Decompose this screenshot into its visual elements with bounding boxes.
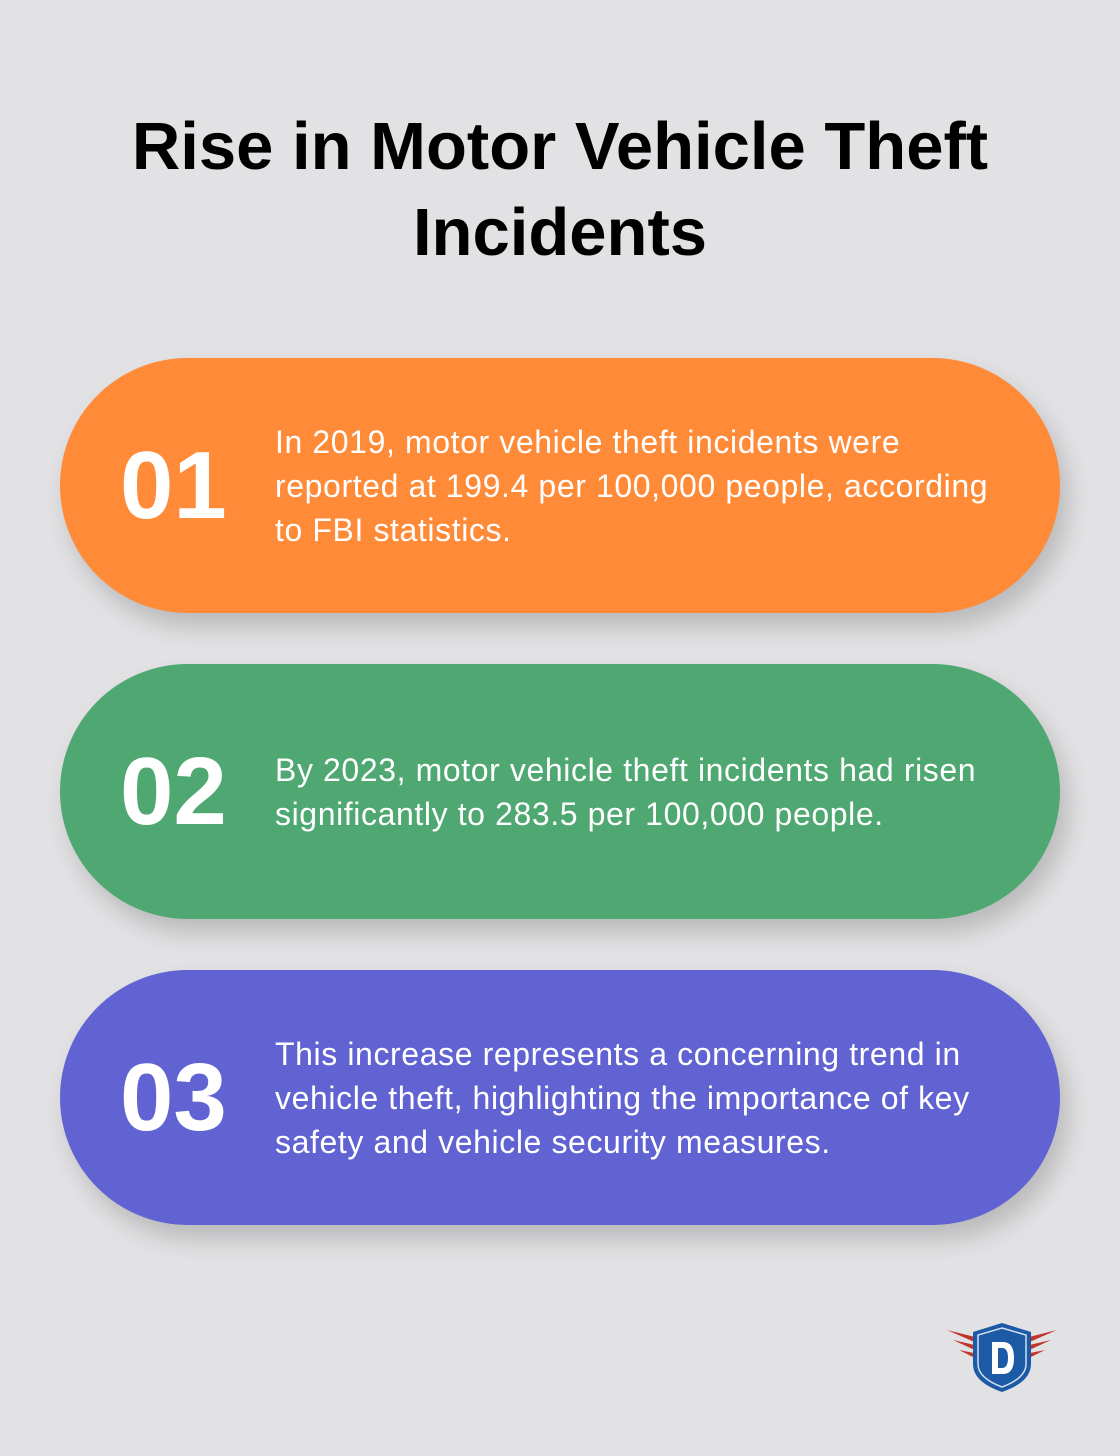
text 01: to FBI statistics. [275,512,512,548]
text 01: reported at 199.4 per 100,000 people, according [275,468,988,504]
icon: logo [947,1323,1057,1392]
panel: 03 [60,970,1060,1225]
title: Rise in Motor Vehicle Theft [132,109,988,184]
text 03: vehicle theft, highlighting the importance of key [275,1080,970,1116]
title: Incidents [413,195,707,270]
text 03 [275,1036,970,1160]
text 03: This increase represents a concerning trend in [275,1036,961,1072]
text 02: By 2023, motor vehicle theft incidents had risen [275,752,976,788]
text 01: In 2019, motor vehicle theft incidents were [275,424,900,460]
text 01 [275,424,988,548]
text 02: significantly to 283.5 per 100,000 people. [275,796,884,832]
title [132,109,988,270]
text 02 [275,752,976,832]
panel: 01 [60,358,1060,613]
number 03: 03 [120,1044,227,1151]
number 01: 01 [120,432,227,539]
number 02: 02 [120,738,227,845]
text 03: safety and vehicle security measures. [275,1124,831,1160]
panel: 02 [60,664,1060,919]
